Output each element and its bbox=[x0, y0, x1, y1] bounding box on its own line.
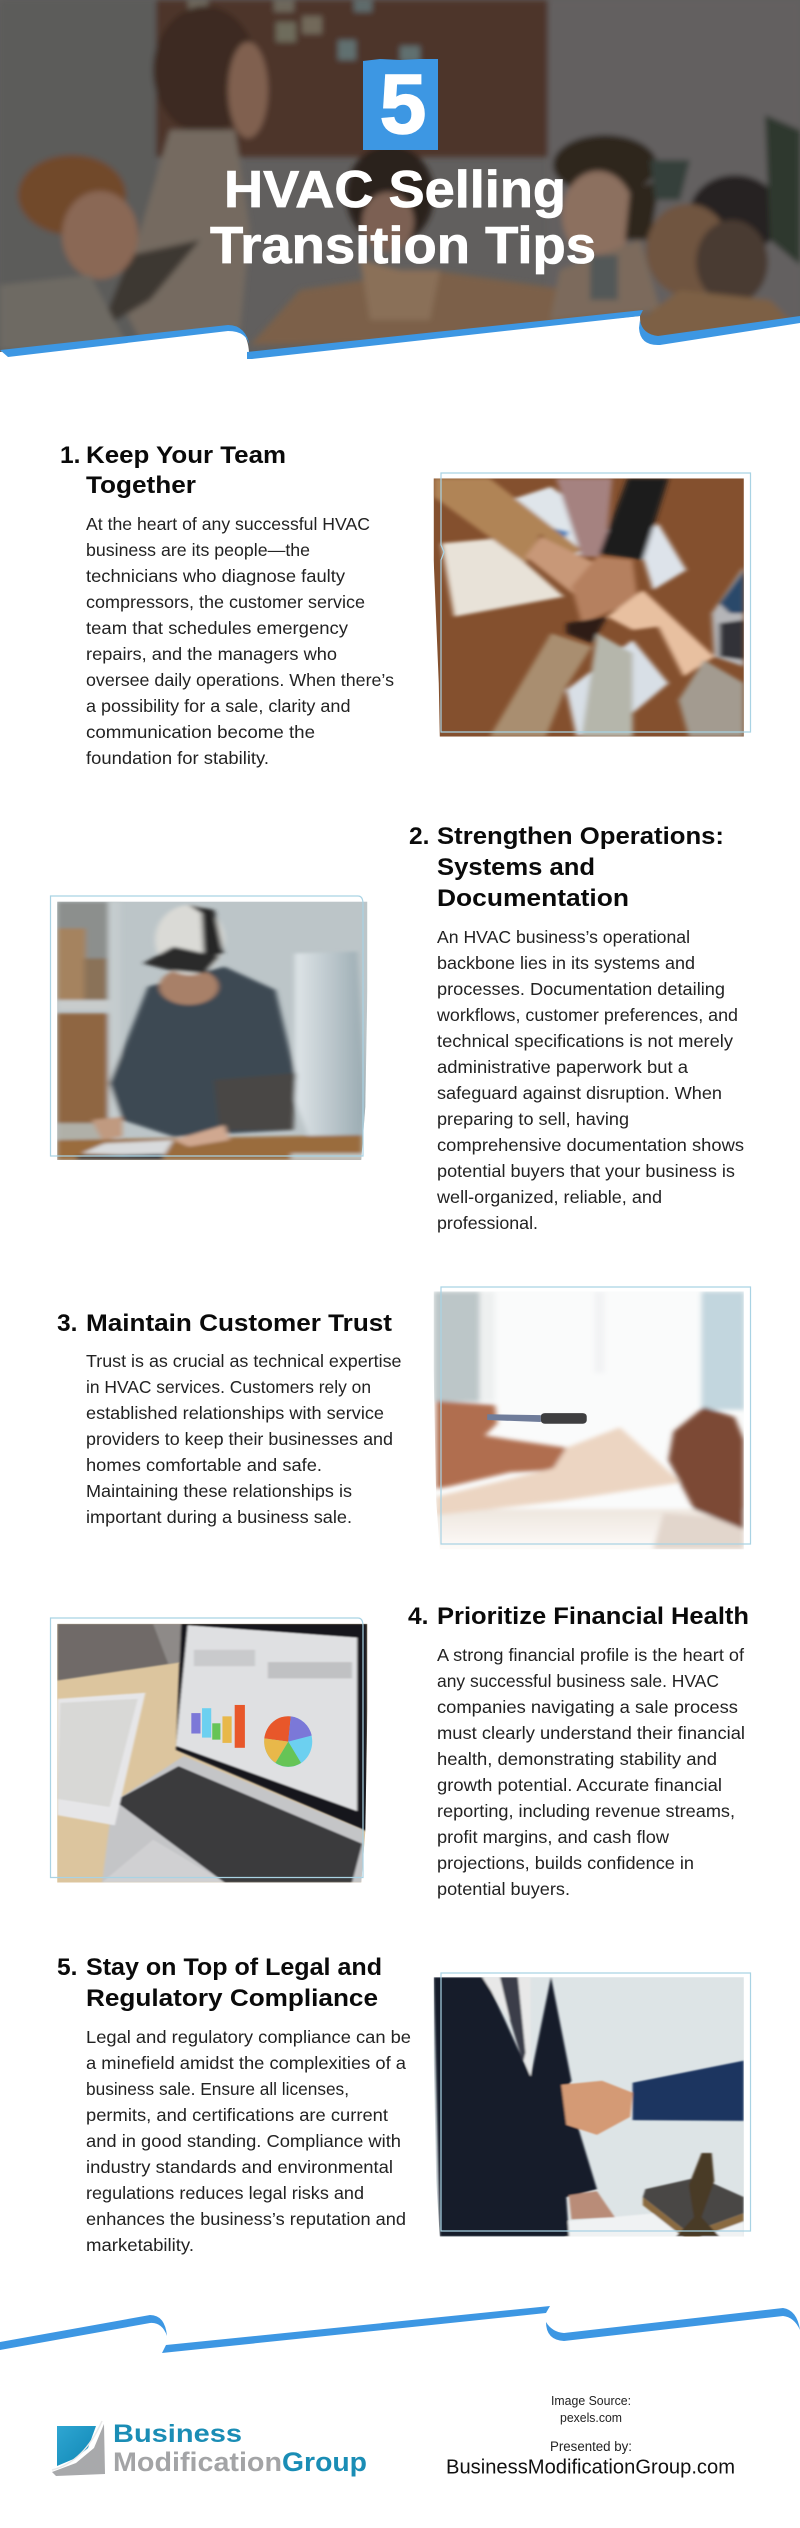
text: tip 1 body: team that schedules emergency bbox=[86, 618, 348, 638]
text: tip 2 body: backbone lies in its systems and bbox=[437, 953, 695, 973]
text: tip 5 body: business sale. Ensure all licenses, bbox=[86, 2079, 349, 2099]
text: tip 1 body: At the heart of any successful HVAC bbox=[86, 514, 370, 534]
footer credits: Image Source: bbox=[551, 2394, 631, 2408]
text: tip 1 body: technicians who diagnose faulty bbox=[86, 566, 345, 586]
text: tip 2 body: processes. Documentation detailing bbox=[437, 979, 725, 999]
heading: tip 5 bbox=[57, 1954, 382, 2012]
footer credits: pexels.com bbox=[560, 2411, 622, 2425]
text: tip 2 body: preparing to sell, having bbox=[437, 1109, 629, 1129]
heading: tip 3: 3. bbox=[57, 1310, 77, 1337]
text: tip 4 body: companies navigating a sale process bbox=[437, 1697, 738, 1717]
panel: tip 5 bbox=[57, 1954, 750, 2255]
text: tip 1 body: repairs, and the managers who bbox=[86, 644, 337, 664]
text: tip 5 body bbox=[86, 2027, 411, 2255]
logo: Business Modification Group bbox=[52, 2420, 367, 2477]
text: tip 2 body bbox=[436, 927, 744, 1233]
heading: tip 1: Together bbox=[86, 472, 196, 499]
text: tip 2 body: professional. bbox=[437, 1213, 538, 1233]
text: tip 4 body: any successful business sale. HVAC bbox=[437, 1671, 719, 1691]
text: tip 4 body: profit margins, and cash flow bbox=[437, 1827, 669, 1847]
footer wave divider bbox=[0, 2306, 800, 2353]
title: HVAC Selling bbox=[224, 161, 566, 219]
text: tip 4 body: projections, builds confidence in bbox=[437, 1853, 694, 1873]
heading: tip 1: Keep Your Team bbox=[86, 442, 286, 469]
panel: tip 4 bbox=[50, 1603, 749, 1899]
panel: tip 3 bbox=[57, 1287, 750, 1553]
heading: tip 2 bbox=[409, 823, 724, 912]
text: tip 1 body: compressors, the customer service bbox=[86, 592, 365, 612]
heading: tip 1 bbox=[60, 442, 286, 499]
heading: tip 1: 1. bbox=[60, 442, 80, 469]
text: tip 3 body bbox=[86, 1351, 402, 1527]
photo: business handshake bbox=[429, 1973, 750, 2241]
number badge bbox=[363, 57, 438, 151]
text: tip 4 body: must clearly understand their financial bbox=[437, 1723, 745, 1743]
text: tip 2 body: workflows, customer preferences, and bbox=[436, 1005, 738, 1025]
text: tip 1 body: communication become the bbox=[86, 722, 315, 742]
text: tip 3 body: in HVAC services. Customers rely on bbox=[86, 1377, 371, 1397]
panel: tip 2 bbox=[50, 823, 744, 1233]
text: tip 5 body: and in good standing. Compliance with bbox=[86, 2131, 401, 2151]
heading: tip 5: 5. bbox=[57, 1954, 77, 1981]
text: tip 4 body: reporting, including revenue streams, bbox=[437, 1801, 735, 1821]
text: tip 5 body: Legal and regulatory compliance can be bbox=[86, 2027, 411, 2047]
logo: Business Modification Group: Group bbox=[282, 2447, 367, 2477]
text: tip 4 body: growth potential. Accurate financial bbox=[437, 1775, 722, 1795]
title: Transition Tips bbox=[210, 217, 596, 275]
text: tip 5 body: regulations reduces legal risks and bbox=[86, 2183, 364, 2203]
text: tip 4 body bbox=[437, 1645, 745, 1899]
text: tip 3 body: important during a business sale. bbox=[86, 1507, 352, 1527]
text: tip 2 body: safeguard against disruption. When bbox=[437, 1083, 722, 1103]
footer credits: Presented by: bbox=[550, 2439, 632, 2454]
text: tip 5 body: enhances the business’s reputation and bbox=[86, 2209, 406, 2229]
text: tip 3 body: providers to keep their businesses and bbox=[86, 1429, 393, 1449]
text: tip 5 body: industry standards and environmental bbox=[86, 2157, 393, 2177]
text: tip 5 body: marketability. bbox=[86, 2235, 194, 2255]
text: tip 3 body: Trust is as crucial as technical expertise bbox=[86, 1351, 402, 1371]
heading: tip 5: Stay on Top of Legal and bbox=[86, 1954, 382, 1981]
text: tip 5 body: a minefield amidst the complexities of a bbox=[86, 2053, 406, 2073]
title bbox=[210, 161, 596, 275]
footer credits bbox=[446, 2394, 735, 2478]
text: tip 3 body: established relationships with service bbox=[86, 1403, 384, 1423]
photo: hands stacked together bbox=[429, 473, 750, 740]
text: tip 3 body: homes comfortable and safe. bbox=[86, 1455, 322, 1475]
text: tip 4 body: health, demonstrating stability and bbox=[437, 1749, 717, 1769]
heading: tip 4: Prioritize Financial Health bbox=[437, 1603, 749, 1630]
logo: Business Modification Group: Modification bbox=[113, 2447, 282, 2477]
logo: Business Modification Group: Business bbox=[113, 2420, 242, 2448]
heading: tip 3: Maintain Customer Trust bbox=[86, 1310, 392, 1337]
heading: tip 4: 4. bbox=[408, 1603, 428, 1630]
header photo banner bbox=[0, 0, 800, 355]
pie chart bbox=[264, 1716, 312, 1767]
text: tip 2 body: potential buyers that your business is bbox=[437, 1161, 735, 1181]
icon: rising chart bbox=[52, 2421, 105, 2476]
bar chart bbox=[191, 1705, 245, 1748]
text: tip 2 body: An HVAC business’s operational bbox=[437, 927, 690, 947]
text: tip 1 body: oversee daily operations. When there’s bbox=[86, 670, 394, 690]
photo: man writing at a desk bbox=[50, 896, 372, 1163]
photo: laptop with charts bbox=[50, 1618, 372, 1887]
text: tip 2 body: comprehensive documentation shows bbox=[437, 1135, 744, 1155]
number badge: 5 bbox=[380, 57, 426, 151]
heading: tip 2: Documentation bbox=[437, 885, 629, 912]
text: tip 1 body: business are its people—the bbox=[86, 540, 310, 560]
text: tip 2 body: administrative paperwork but a bbox=[437, 1057, 688, 1077]
text: tip 3 body: Maintaining these relationships is bbox=[86, 1481, 352, 1501]
heading: tip 2: Systems and bbox=[437, 854, 595, 881]
text: tip 2 body: technical specifications is not merely bbox=[437, 1031, 733, 1051]
panel: tip 1 bbox=[60, 442, 750, 768]
text: tip 5 body: permits, and certifications are current bbox=[86, 2105, 388, 2125]
text: tip 4 body: potential buyers. bbox=[437, 1879, 570, 1899]
footer credits: BusinessModificationGroup.com bbox=[446, 2456, 735, 2478]
heading: tip 2: Strengthen Operations: bbox=[437, 823, 724, 850]
text: tip 1 body: a possibility for a sale, clarity and bbox=[86, 696, 350, 716]
text: tip 4 body: A strong financial profile is the heart of bbox=[437, 1645, 744, 1665]
text: tip 2 body: well-organized, reliable, and bbox=[436, 1187, 662, 1207]
photo: handing over a document bbox=[429, 1287, 750, 1553]
heading: tip 5: Regulatory Compliance bbox=[86, 1985, 378, 2012]
text: tip 1 body bbox=[86, 514, 394, 768]
header wave edge bbox=[0, 310, 800, 380]
heading: tip 2: 2. bbox=[409, 823, 429, 850]
text: tip 1 body: foundation for stability. bbox=[86, 748, 269, 768]
